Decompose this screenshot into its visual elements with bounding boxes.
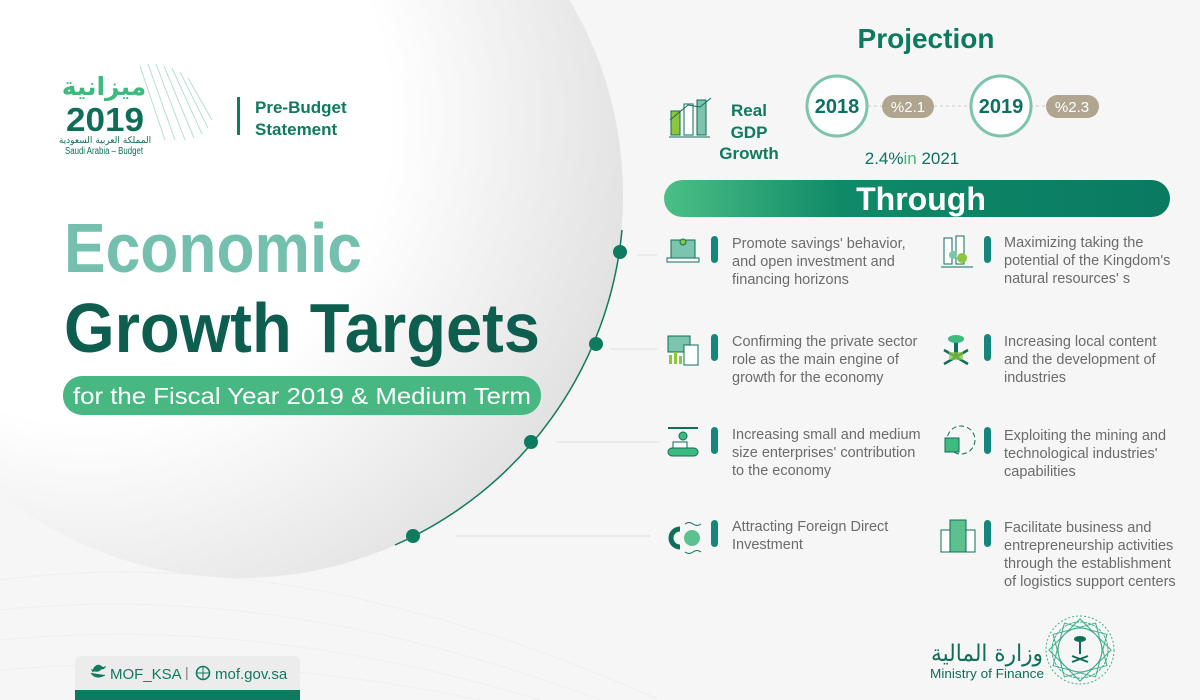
item 6: Exploiting the mining and [1004, 428, 1166, 444]
logo: Budget 2019: المملكة العربية السعودية [59, 136, 151, 146]
social footer: MOF_KSA [110, 666, 182, 683]
2019 circle [971, 76, 1031, 136]
item 4 [944, 334, 1157, 386]
ministry of finance logo: وزارة المالية [931, 641, 1043, 667]
title [64, 209, 540, 367]
item 7: Investment [732, 537, 803, 553]
item 2 [941, 235, 1170, 287]
timeline arc [395, 230, 622, 545]
logo: Budget 2019: 2019 [66, 101, 144, 138]
pre-budget statement: Pre-Budget [255, 98, 347, 117]
pill 2.1: %2.1 [891, 99, 925, 116]
item 1: financing horizons [732, 272, 849, 288]
icon: chart [669, 98, 711, 137]
item 4: industries [1004, 370, 1066, 386]
logo: Budget 2019: Saudi Arabia – Budget [65, 146, 143, 157]
item 8: of logistics support centers [1004, 574, 1176, 590]
title: Growth Targets [64, 289, 540, 367]
pill 2.1 [882, 95, 934, 118]
through bar [664, 180, 1170, 217]
item 3 [668, 334, 918, 386]
timeline dots [406, 245, 660, 543]
item 8: entrepreneurship activities [1004, 538, 1173, 554]
title: Economic [64, 209, 362, 287]
item 8: through the establishment [1004, 556, 1171, 572]
item 3: growth for the economy [732, 370, 884, 386]
item 1 [667, 236, 906, 288]
real gdp growth: GDP [731, 123, 767, 142]
through bar: Through [856, 181, 986, 217]
item 6: technological industries' [1004, 446, 1158, 462]
subtitle pill [63, 376, 541, 415]
social footer [75, 656, 300, 700]
logo: Budget 2019 [59, 64, 212, 157]
item 2: potential of the Kingdom's [1004, 253, 1170, 269]
item 6: capabilities [1004, 464, 1076, 480]
social footer: mof.gov.sa [215, 666, 288, 683]
2018 circle [807, 76, 867, 136]
item 3: role as the main engine of [732, 352, 900, 368]
item 3: Confirming the private sector [732, 334, 918, 350]
projection heading: Projection [858, 23, 994, 54]
subtitle pill: for the Fiscal Year 2019 & Medium Term [73, 383, 531, 409]
item 5 [668, 427, 921, 479]
item 5: size enterprises' contribution [732, 445, 915, 461]
item 8: Facilitate business and [1004, 520, 1152, 536]
item 7 [671, 519, 888, 554]
big white circle [0, 0, 623, 578]
item 1: Promote savings' behavior, [732, 236, 906, 252]
logo: Budget 2019: ميزانية [62, 72, 146, 102]
item 8 [941, 520, 1176, 590]
real gdp growth: Growth [719, 144, 779, 163]
item 4: and the development of [1004, 352, 1157, 368]
2021 note: 2.4%in 2021 [865, 149, 959, 168]
item 2: Maximizing taking the [1004, 235, 1143, 251]
item 6 [945, 426, 1166, 480]
item 2: natural resources' s [1004, 271, 1130, 287]
ministry of finance logo [930, 616, 1114, 684]
pill 2.3 [1046, 95, 1099, 118]
item 4: Increasing local content [1004, 334, 1156, 350]
2018 circle: 2018 [815, 96, 859, 118]
pill 2.3: %2.3 [1055, 99, 1089, 116]
item 1: and open investment and [732, 254, 895, 270]
real gdp growth [719, 101, 779, 163]
2019 circle: 2019 [979, 96, 1023, 118]
item 5: to the economy [732, 463, 832, 479]
divider [237, 97, 240, 135]
item 7: Attracting Foreign Direct [732, 519, 888, 535]
pre-budget statement: Statement [255, 120, 338, 139]
ministry of finance logo: Ministry of Finance [930, 666, 1044, 681]
pre-budget statement [255, 98, 347, 139]
item 5: Increasing small and medium [732, 427, 921, 443]
real gdp growth: Real [731, 101, 767, 120]
